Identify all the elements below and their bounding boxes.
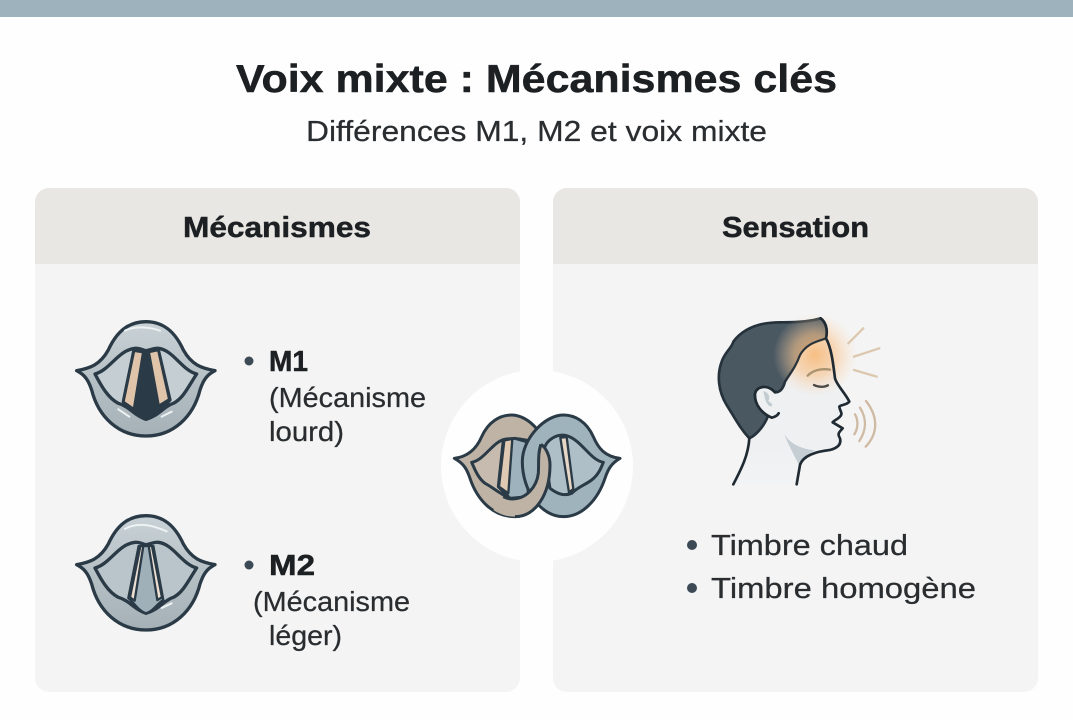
label M1: lourd) xyxy=(269,416,344,447)
heading: mécanismes: Mécanismes xyxy=(183,212,371,244)
top bar xyxy=(0,0,1073,17)
icon: interlocked larynxes xyxy=(454,415,620,517)
text: timbre chaud: Timbre chaud xyxy=(711,530,908,562)
text: timbre homogène: Timbre homogène xyxy=(711,573,976,605)
heading: sensation xyxy=(553,188,1038,264)
bullet: timbre chaud xyxy=(687,540,697,550)
title: Voix mixte : Mécanismes clés xyxy=(236,58,837,101)
heading: sensation: Sensation xyxy=(722,212,869,244)
label M2: M2 xyxy=(269,550,315,582)
icon: larynx M2 xyxy=(77,516,215,630)
panel: sensation xyxy=(553,188,1038,692)
heading: mécanismes xyxy=(35,188,520,264)
center circle xyxy=(441,370,633,562)
bullet M1 xyxy=(244,356,254,366)
label M1: (Mécanisme xyxy=(269,382,426,413)
label M2: léger) xyxy=(269,620,342,651)
icon: larynx M1 xyxy=(77,322,215,436)
bullet: timbre homogène xyxy=(687,583,697,593)
icon: head profile xyxy=(719,313,879,484)
panel: mécanismes xyxy=(35,188,520,692)
bullet M2 xyxy=(244,560,254,570)
label M1 xyxy=(269,346,426,447)
label M1: M1 xyxy=(269,346,308,378)
subtitle: Différences M1, M2 et voix mixte xyxy=(306,116,767,148)
label M2: (Mécanisme xyxy=(253,586,410,617)
label M2 xyxy=(253,550,410,651)
